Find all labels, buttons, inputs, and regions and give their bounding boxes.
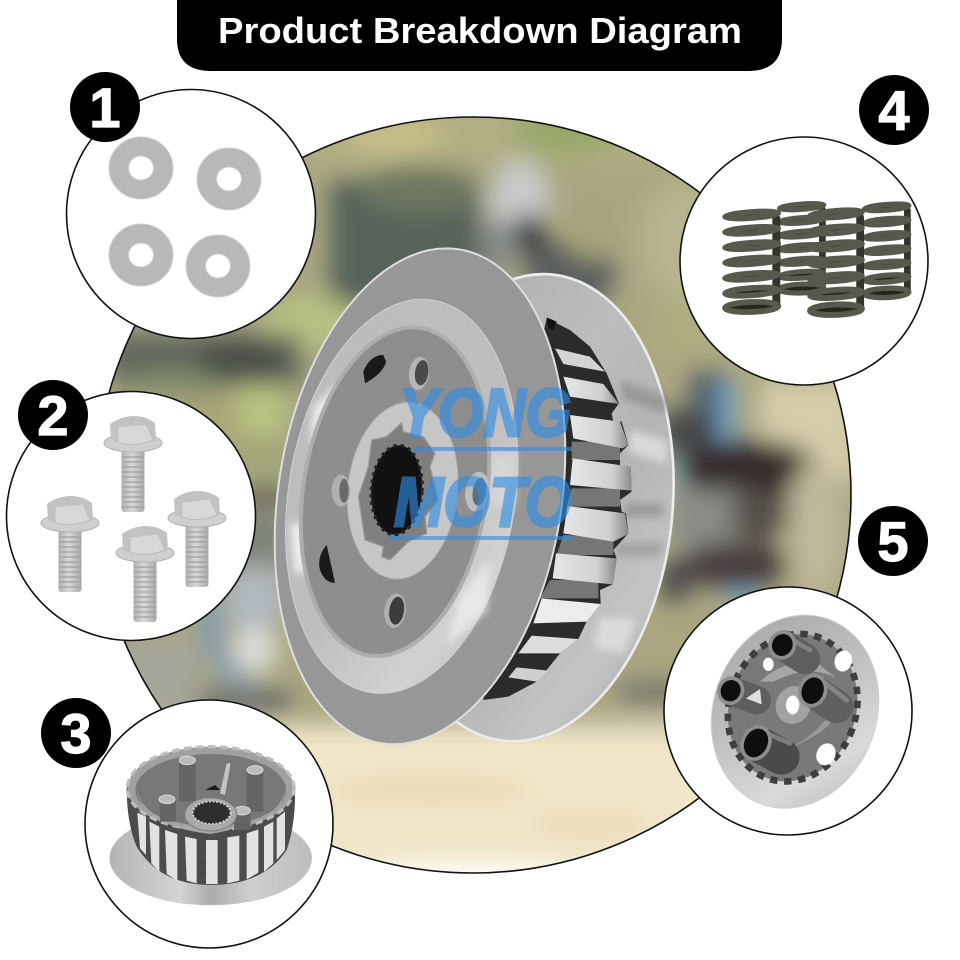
icon: springs xyxy=(725,202,911,316)
badge 2: 2 xyxy=(37,384,69,447)
panel 3: clutch basket xyxy=(85,700,333,948)
background circle outline xyxy=(95,117,851,873)
watermark rule bottom xyxy=(389,536,572,540)
watermark word YONG: YONG xyxy=(399,375,571,451)
rear disc streaks xyxy=(593,380,667,653)
bore xyxy=(368,444,425,536)
badge 1: 1 xyxy=(89,76,121,139)
title text: Product Breakdown Diagram xyxy=(218,10,742,51)
rear flange disc xyxy=(361,260,696,756)
badge 4: 4 xyxy=(878,79,910,142)
title pill xyxy=(177,0,782,71)
badge 5 xyxy=(858,506,928,576)
black slots xyxy=(319,355,386,583)
badge 2 xyxy=(18,380,88,450)
icon: bolts xyxy=(41,416,226,622)
watermark word MOTO: MOTO xyxy=(394,463,571,541)
light ring xyxy=(259,282,545,710)
badge 5: 5 xyxy=(877,510,909,573)
panel 4: springs xyxy=(680,137,928,385)
icon: pressure plate xyxy=(685,591,905,832)
recessed plate xyxy=(279,314,511,670)
front disc xyxy=(241,227,599,765)
bolt holes xyxy=(332,355,492,629)
drum recess and teeth xyxy=(483,317,632,700)
watermark rule top xyxy=(414,447,572,451)
icon: washers xyxy=(109,137,261,297)
ring highlights xyxy=(290,383,517,647)
badge 1 xyxy=(70,72,140,142)
background: blurred motorcycle photo circle xyxy=(90,105,860,896)
splined hub centre xyxy=(358,423,438,560)
badge 3 xyxy=(41,698,111,768)
hub ring xyxy=(339,397,467,585)
watermark: YONG MOTO xyxy=(389,375,572,541)
main product: clutch hub xyxy=(241,227,696,765)
badge 3: 3 xyxy=(60,702,92,765)
badge 4 xyxy=(859,75,929,145)
panel 1: washers xyxy=(66,90,316,338)
icon: clutch basket xyxy=(110,747,312,905)
panel 5: pressure plate xyxy=(664,587,912,835)
panel 2: bolts xyxy=(6,392,256,640)
